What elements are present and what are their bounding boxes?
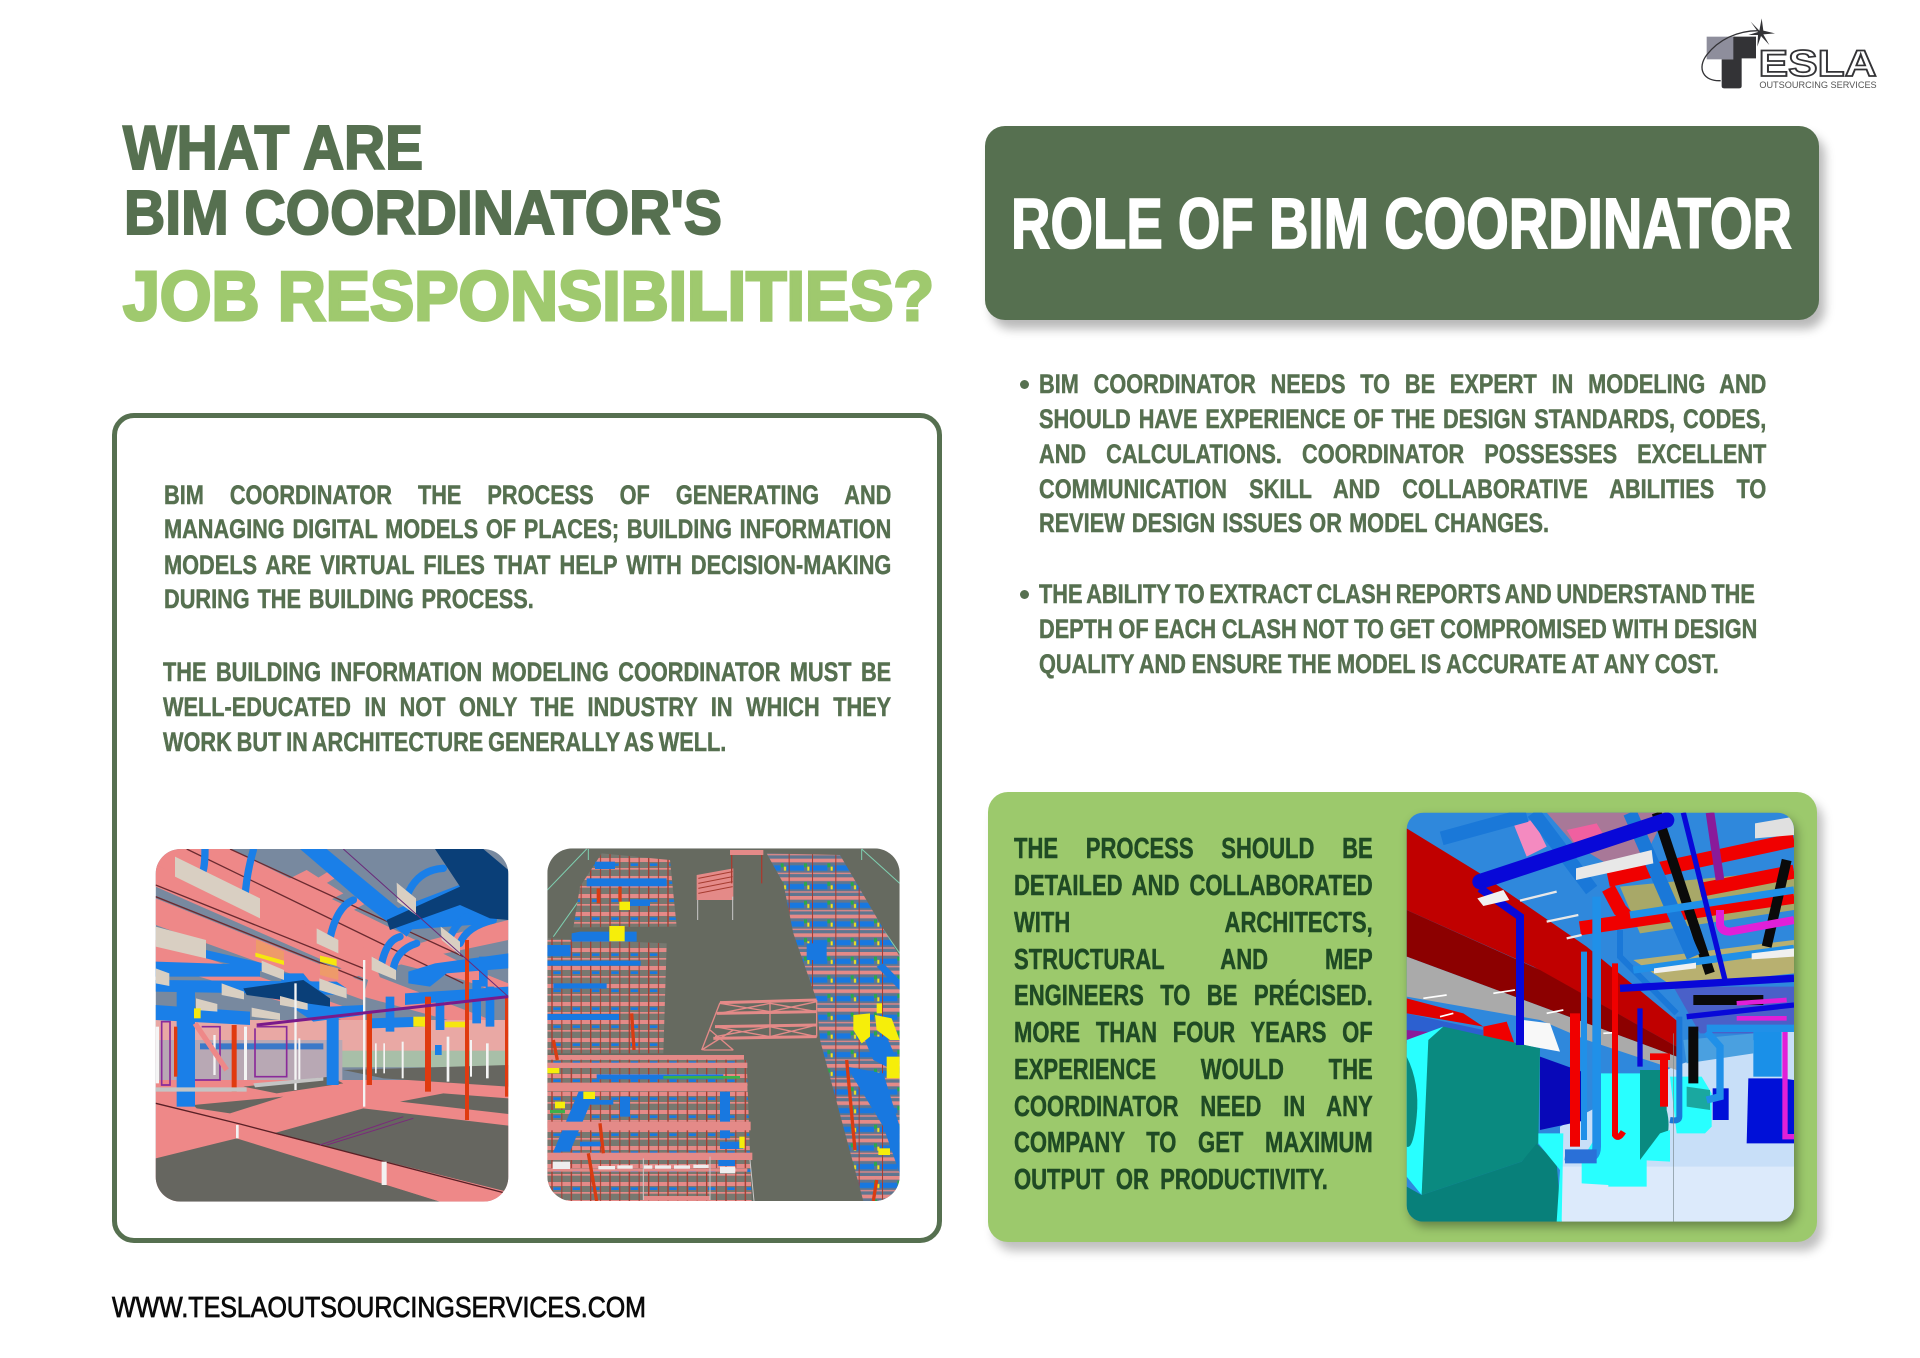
red pipes [1580, 840, 1794, 928]
orange columns [174, 940, 508, 1120]
grey slabs [400, 1093, 508, 1114]
image: BIM interior model [156, 849, 508, 1202]
white posts [156, 960, 489, 1107]
chillers [1582, 1073, 1647, 1187]
beige panels [156, 857, 460, 1020]
text block: process description [1014, 833, 1373, 1196]
title: what are BIM coordinator's job responsibilities [122, 114, 934, 335]
logo: Tesla Outsourcing Services: OUTSOURCING SERVICES [1759, 80, 1877, 90]
ceiling detail [1546, 812, 1666, 870]
text: WORK BUT IN ARCHITECTURE GENERALLY AS WELL. [163, 727, 726, 757]
blue machine behind [1540, 1056, 1581, 1130]
blue ducts [156, 950, 263, 977]
orange columns [553, 887, 877, 1201]
text: THE ABILITY TO EXTRACT CLASH REPORTS AND UNDERSTAND THE [1039, 579, 1755, 609]
bullet [1020, 380, 1029, 389]
far blue machines [1753, 1030, 1782, 1077]
title: what are BIM coordinator's job responsibilities: BIM COORDINATOR'S [124, 179, 722, 248]
text: COMPANY TO GET MAXIMUM [1014, 1127, 1373, 1159]
floor pink [156, 1080, 508, 1202]
text: AND CALCULATIONS. COORDINATOR POSSESSES EXCELLENT [1039, 439, 1766, 469]
text: COMMUNICATION SKILL AND COLLABORATIVE ABILITIES TO [1039, 474, 1766, 504]
bridge truss [702, 1000, 817, 1050]
text: OUTPUT OR PRODUCTIVITY. [1014, 1164, 1328, 1196]
text: DURING THE BUILDING PROCESS. [164, 584, 534, 614]
dark duct [387, 849, 508, 930]
text block: education requirement [162, 657, 892, 757]
logo: Tesla Outsourcing Services [1701, 18, 1877, 90]
red duct [1407, 828, 1680, 1047]
logo: Tesla Outsourcing Services: ESLA [1759, 42, 1877, 84]
text: WITH ARCHITECTS, [1014, 907, 1373, 939]
text: THE BUILDING INFORMATION MODELING COORDINATOR MUST BE [163, 657, 891, 687]
panel: role heading [985, 126, 1819, 320]
bullet [1020, 590, 1029, 599]
text: MORE THAN FOUR YEARS OF [1014, 1017, 1373, 1049]
text block: definition of BIM coordinator [164, 480, 891, 614]
text: WELL-EDUCATED IN NOT ONLY THE INDUSTRY IN WHICH THEY [163, 692, 891, 722]
text: MANAGING DIGITAL MODELS OF PLACES; BUILDING INFORMATION [164, 514, 891, 544]
text: COORDINATOR NEED IN ANY [1014, 1091, 1373, 1123]
deep blue pipes [1480, 820, 1667, 882]
ceiling beams [156, 849, 508, 997]
floor [1560, 1027, 1794, 1222]
text: ENGINEERS TO BE PRÉCISED. [1014, 980, 1373, 1012]
text: DETAILED AND COLLABORATED [1014, 870, 1373, 902]
title: what are BIM coordinator's job responsibilities: WHAT ARE [123, 114, 423, 183]
white labels [553, 1162, 735, 1173]
panel: BIM coordinator description [112, 413, 942, 1243]
magenta pipes [1720, 910, 1794, 932]
title: what are BIM coordinator's job responsibilities: JOB RESPONSIBILITIES? [123, 257, 934, 335]
azure pipes [1442, 813, 1693, 957]
text: THE PROCESS SHOULD BE [1014, 833, 1373, 865]
purple pipework [257, 997, 508, 1025]
blue and yellow equipment [547, 862, 900, 1173]
white fixtures [1576, 850, 1653, 880]
black pipes [1657, 813, 1787, 1083]
text: BIM COORDINATOR THE PROCESS OF GENERATING AND [164, 480, 891, 510]
text: QUALITY AND ENSURE THE MODEL IS ACCURATE AT ANY COST. [1039, 649, 1719, 679]
yellow highlights [194, 953, 465, 1027]
text: REVIEW DESIGN ISSUES OR MODEL CHANGES. [1039, 508, 1549, 538]
text: BIM COORDINATOR NEEDS TO BE EXPERT IN MODELING AND [1039, 369, 1766, 399]
text: SHOULD HAVE EXPERIENCE OF THE DESIGN STANDARDS, CODES, [1039, 404, 1766, 434]
text: EXPERIENCE WOULD THE [1014, 1054, 1373, 1086]
image: BIM aerial model [547, 848, 900, 1201]
text: DEPTH OF EACH CLASH NOT TO GET COMPROMISED WITH DESIGN [1039, 614, 1757, 644]
image: MEP plant room model [1404, 812, 1802, 1232]
thick pink beams [547, 1055, 752, 1201]
far band [156, 1020, 508, 1051]
text: STRUCTURAL AND MEP [1014, 944, 1373, 976]
teal machine [1407, 1027, 1443, 1195]
text block: right column bullet list [1020, 369, 1766, 679]
text: MODELS ARE VIRTUAL FILES THAT HELP WITH DECISION-MAKING [164, 550, 891, 580]
panel: process callout [988, 792, 1817, 1242]
